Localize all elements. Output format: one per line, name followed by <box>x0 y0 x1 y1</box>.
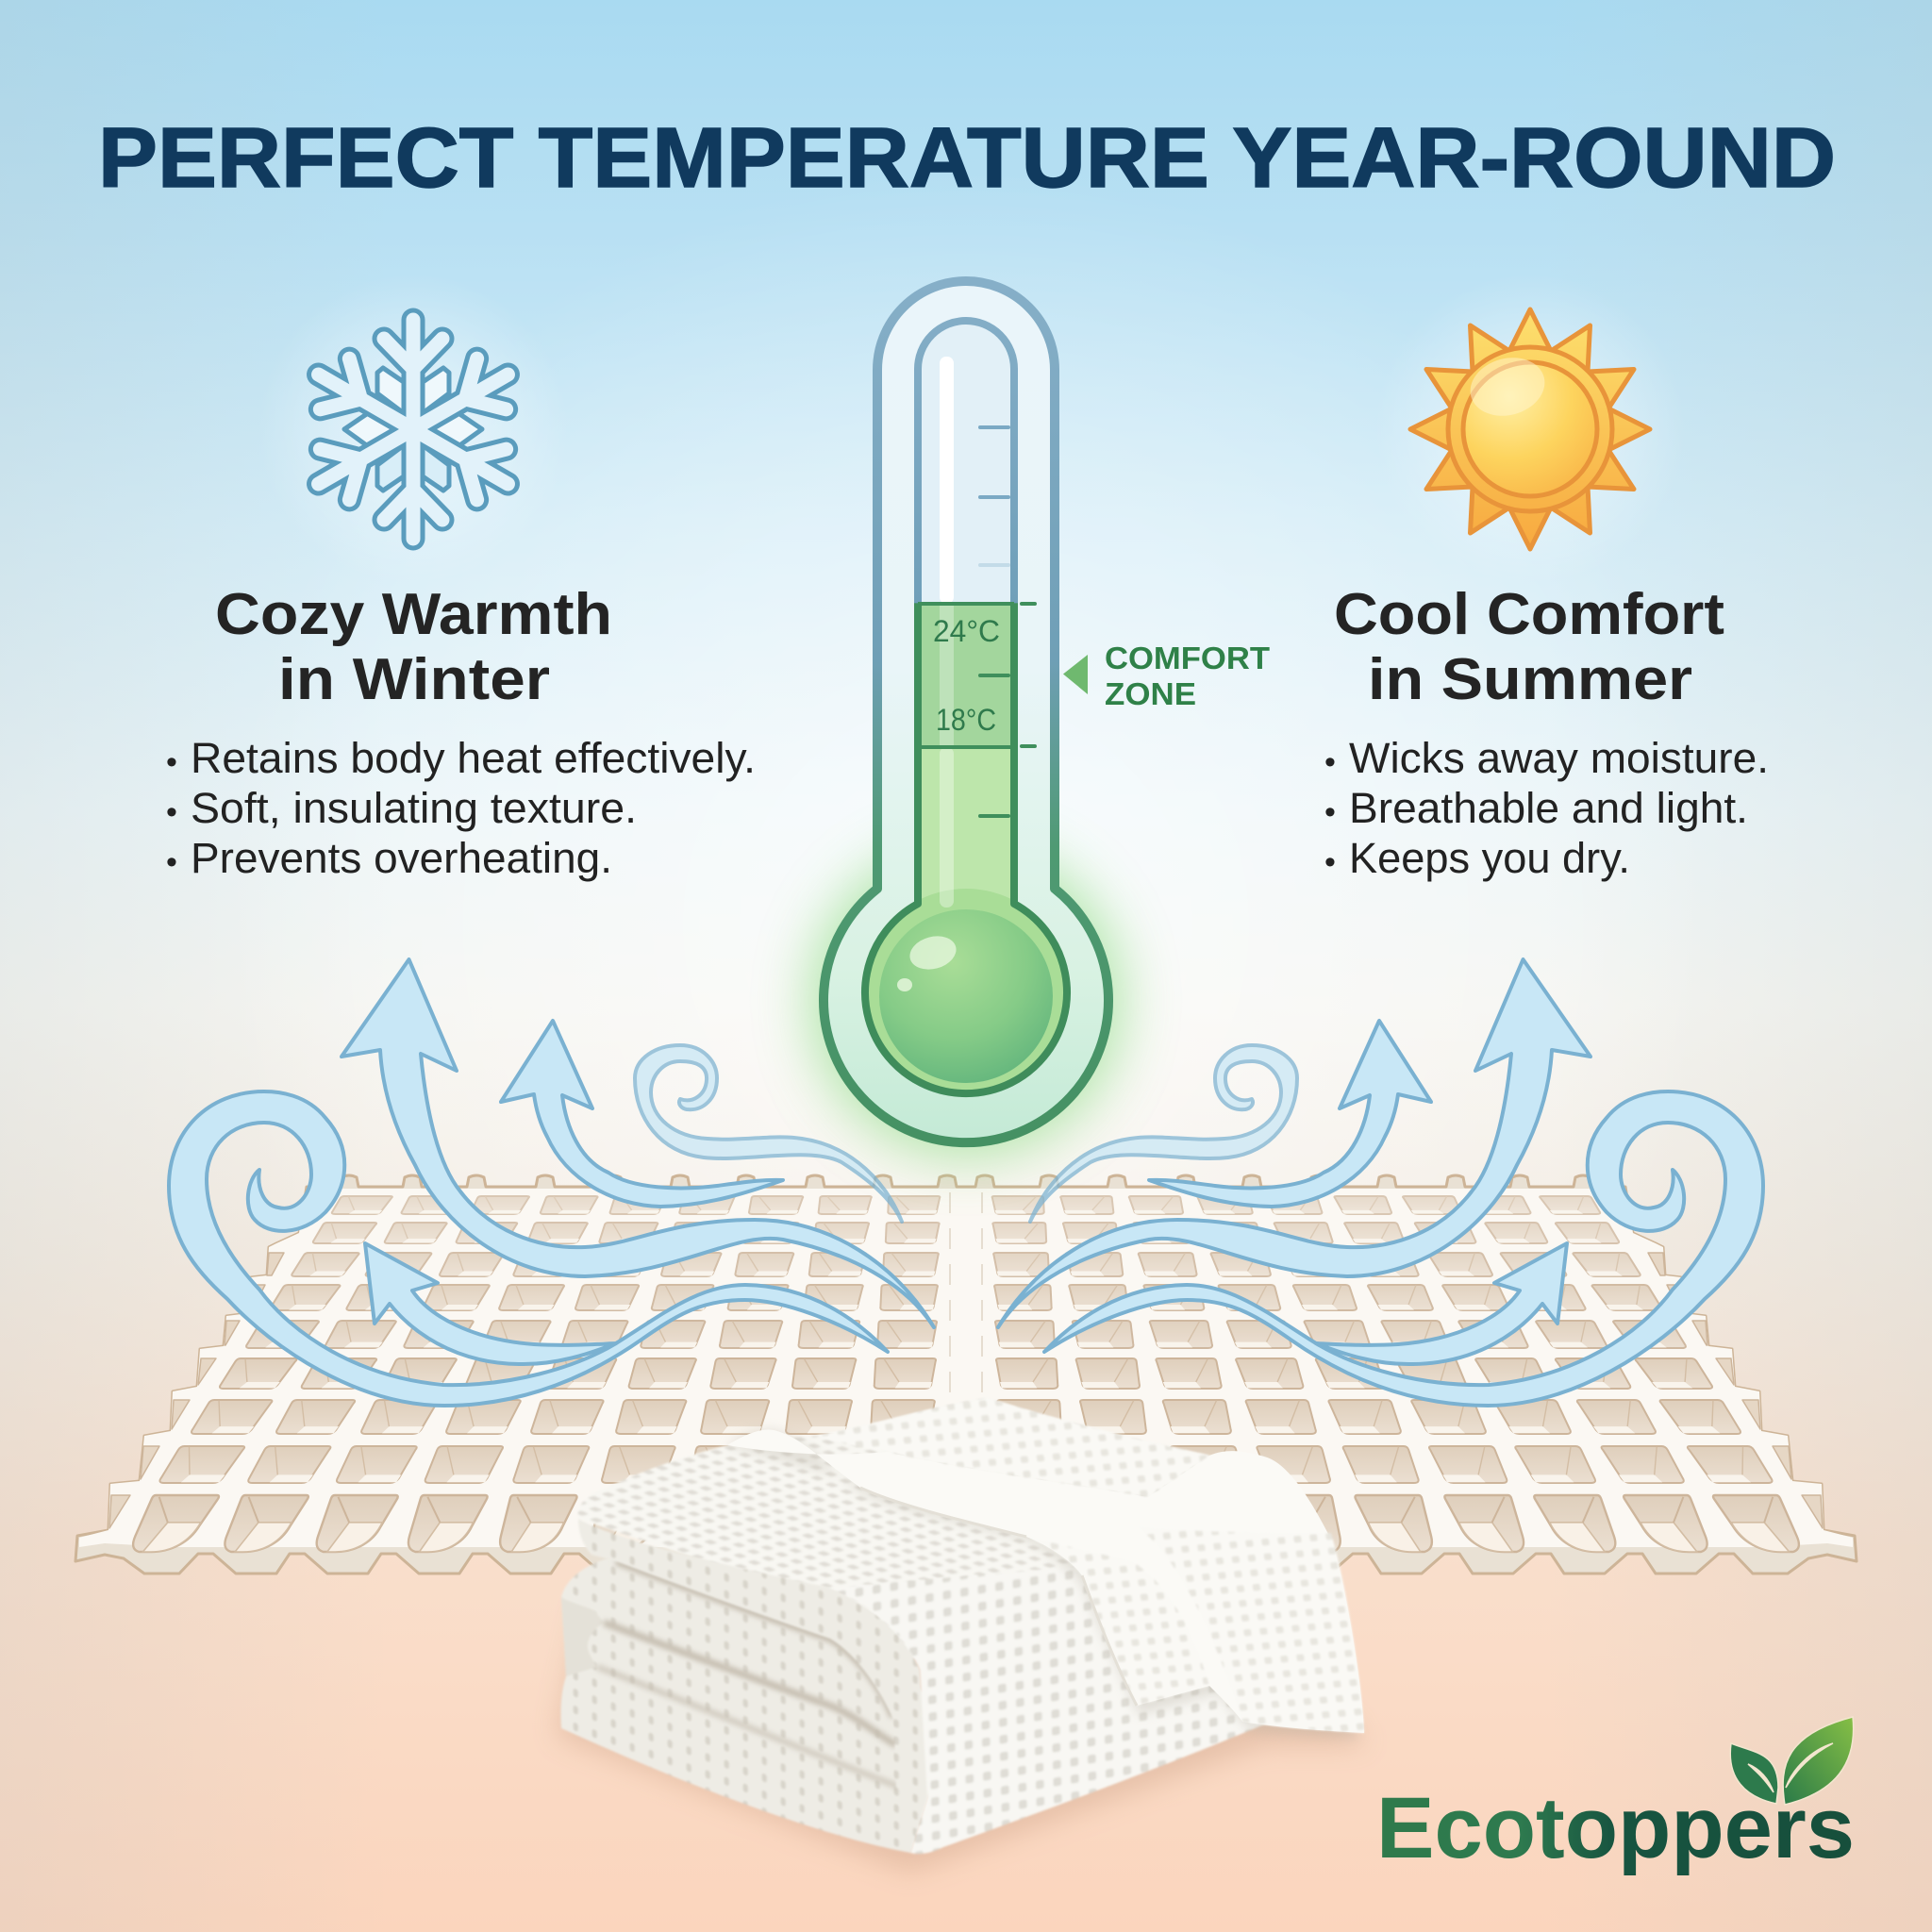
heading: cozy warmth in winter: Cozy Warmth <box>215 582 612 647</box>
logo leaves <box>1730 1717 1854 1805</box>
label: 24°C: 24°C <box>933 614 1000 648</box>
arrow: faint swirl <box>635 1045 902 1222</box>
title: PERFECT TEMPERATURE YEAR-ROUND <box>98 111 1836 206</box>
label: 18°C: 18°C <box>936 703 996 737</box>
text block: winter benefits: • <box>166 744 177 780</box>
text block: summer benefits <box>1324 734 1769 882</box>
heading: cozy warmth in winter: in Winter <box>278 647 550 712</box>
text block: summer benefits: • <box>1324 844 1336 880</box>
logo: Ecotoppers <box>1376 1717 1855 1876</box>
blanket front wrap <box>830 1566 1264 1854</box>
text block: summer benefits: • <box>1324 744 1336 780</box>
heading: cool comfort in summer: in Summer <box>1368 647 1692 712</box>
blanket top face <box>578 1398 1331 1689</box>
logo wordmark: Ecotoppers <box>1376 1780 1855 1876</box>
text block: summer benefits: Breathable and light. <box>1349 784 1748 832</box>
grid: right half <box>966 1175 1857 1574</box>
panel: winter <box>166 274 756 882</box>
bulb highlights <box>897 931 960 991</box>
arrow: large rising <box>341 959 934 1327</box>
text block: winter benefits: • <box>166 794 177 830</box>
label: comfort zone: COMFORT <box>1105 641 1270 675</box>
grid: left half <box>75 1175 966 1574</box>
blanket draped flap <box>727 1398 1364 1739</box>
text block: winter benefits: Retains body heat effectively. <box>191 734 756 782</box>
panel: summer <box>1324 274 1769 882</box>
arrow: returning low <box>365 1243 616 1364</box>
thermometer inner tube <box>869 357 1063 1091</box>
text block: winter benefits: Soft, insulating texture. <box>191 784 637 832</box>
arrow: medium rising <box>501 1021 783 1207</box>
airflow: warm orange arrows <box>998 959 1763 1406</box>
thermometer outer glass <box>824 281 1108 1142</box>
label: comfort zone: ZONE <box>1105 676 1196 711</box>
blanket <box>557 1398 1368 1873</box>
arrow: comfort zone pointer <box>1063 655 1088 694</box>
airflow: cold blue arrows <box>169 959 934 1406</box>
text block: summer benefits: Keeps you dry. <box>1349 834 1630 882</box>
heading: cozy warmth in winter <box>215 582 612 712</box>
arrow: large spiral <box>169 1091 888 1406</box>
blanket fold creases <box>597 1561 904 1789</box>
icon: snowflake <box>258 274 569 585</box>
blanket shadow <box>557 1604 1368 1873</box>
waffle grid mat <box>75 1175 1857 1574</box>
icon: sun <box>1374 274 1686 585</box>
blanket folded layers <box>561 1557 929 1853</box>
text block: winter benefits: • <box>166 844 177 880</box>
thermometer <box>824 281 1108 1142</box>
thermometer glow <box>810 844 1122 1156</box>
text block: summer benefits: Wicks away moisture. <box>1349 734 1769 782</box>
blanket roll edge <box>578 1519 927 1853</box>
scale ticks <box>980 427 1035 816</box>
label: comfort zone <box>1105 641 1270 711</box>
text block: winter benefits: Prevents overheating. <box>191 834 612 882</box>
callout: comfort zone <box>1063 641 1270 711</box>
text block: winter benefits <box>166 734 756 882</box>
heading: cool comfort in summer: Cool Comfort <box>1334 582 1724 647</box>
comfort zone band <box>918 604 1014 747</box>
heading: cool comfort in summer <box>1334 582 1724 712</box>
text block: summer benefits: • <box>1324 794 1336 830</box>
